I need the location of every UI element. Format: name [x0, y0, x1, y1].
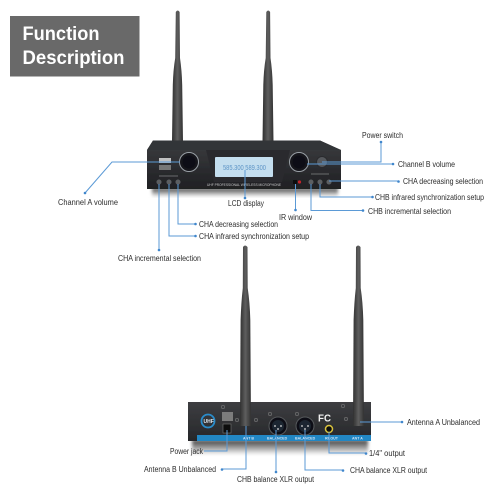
icon: quarter inch jack — [326, 426, 332, 432]
icon: channel A knob — [180, 152, 198, 172]
callout: CHB infrared synchronization setup — [320, 184, 484, 202]
icon: power switch — [316, 156, 328, 168]
front panel small text: UHF PROFESSIONAL WIRELESS MICROPHONE — [207, 183, 282, 187]
callout: LCD display: LCD display — [228, 198, 265, 208]
icon: power jack — [223, 424, 231, 433]
callout: Channel B volume: Channel B volume — [398, 159, 455, 169]
callout: quarter inch output — [329, 432, 406, 458]
callout: Antenna A Unbalanced — [360, 417, 480, 427]
channel B buttons — [308, 179, 332, 185]
button brackets — [159, 174, 329, 176]
callout: CHA decreasing selection left — [178, 184, 278, 229]
icon: UHF logo — [202, 414, 214, 428]
callout: Channel A volume: Channel A volume — [58, 197, 118, 207]
rear receiver — [188, 246, 371, 455]
title — [10, 16, 140, 76]
title: Description — [22, 47, 124, 69]
callout: CHB incremental selection — [311, 184, 451, 216]
icon: rear right antenna — [353, 246, 364, 426]
callout: CHA incremental selection — [118, 184, 201, 263]
callout: CHA incremental selection: CHA incremental selection — [118, 253, 201, 263]
icon: CHA XLR connector — [296, 417, 314, 435]
blue label strip — [197, 435, 371, 441]
icon: front right antenna — [262, 10, 274, 142]
callout: CHB balance XLR output: CHB balance XLR output — [237, 474, 314, 484]
callout: Power jack: Power jack — [170, 446, 204, 456]
rear body — [188, 402, 371, 441]
blue label strip: RF.OUT — [325, 436, 339, 440]
blue label strip: ANT B — [243, 436, 254, 440]
front receiver — [147, 10, 341, 197]
callout: CHB incremental selection: CHB incremental selection — [368, 206, 451, 216]
callout: quarter inch output: 1/4" output — [369, 448, 406, 458]
callout: CHA decreasing selection right: CHA decreasing selection — [403, 176, 483, 186]
channel A buttons — [156, 179, 181, 185]
callout: Power switch: Power switch — [362, 130, 403, 140]
callout: Power switch — [322, 130, 403, 162]
icon: UHF logo: UHF — [204, 419, 214, 425]
callout: IR window — [279, 184, 313, 222]
icon: front left antenna — [172, 10, 183, 142]
callout: Antenna B Unbalanced — [144, 426, 246, 474]
screws — [221, 404, 348, 422]
blue label strip: ANT A — [352, 436, 363, 440]
icon: channel B knob — [290, 152, 308, 172]
callout: CHA decreasing selection left: CHA decreasing selection — [199, 219, 278, 229]
lcd display: 585.300 589.300 — [223, 165, 266, 172]
callout: CHA infrared synchronization setup — [169, 184, 309, 241]
icon: FC mark: FC — [318, 414, 331, 424]
blue label strip: BALANCED — [267, 436, 288, 440]
callout: CHA infrared synchronization setup: CHA infrared synchronization setup — [199, 231, 309, 241]
receiver body — [147, 140, 341, 189]
callout: LCD display — [228, 170, 265, 208]
callout: CHA balance XLR output — [305, 430, 427, 475]
blue label strip: BALANCED — [295, 436, 316, 440]
lcd display — [215, 157, 273, 177]
callout: Antenna A Unbalanced: Antenna A Unbalanced — [407, 417, 480, 427]
shadow under front receiver — [152, 188, 338, 197]
callout: IR window: IR window — [279, 212, 313, 222]
shadow under rear receiver — [192, 440, 368, 455]
power spec label — [222, 412, 233, 421]
callout: Channel A volume — [58, 162, 180, 207]
callout: Power jack — [170, 430, 227, 456]
title: Function — [22, 23, 100, 45]
ir window — [293, 180, 301, 184]
brand label — [159, 158, 171, 170]
icon: rear left antenna — [240, 246, 251, 426]
callout: CHB balance XLR output — [237, 430, 314, 484]
icon: CHB XLR connector — [269, 417, 287, 435]
callout: CHA balance XLR output: CHA balance XLR output — [350, 465, 427, 475]
callout: Antenna B Unbalanced: Antenna B Unbalanced — [144, 464, 216, 474]
